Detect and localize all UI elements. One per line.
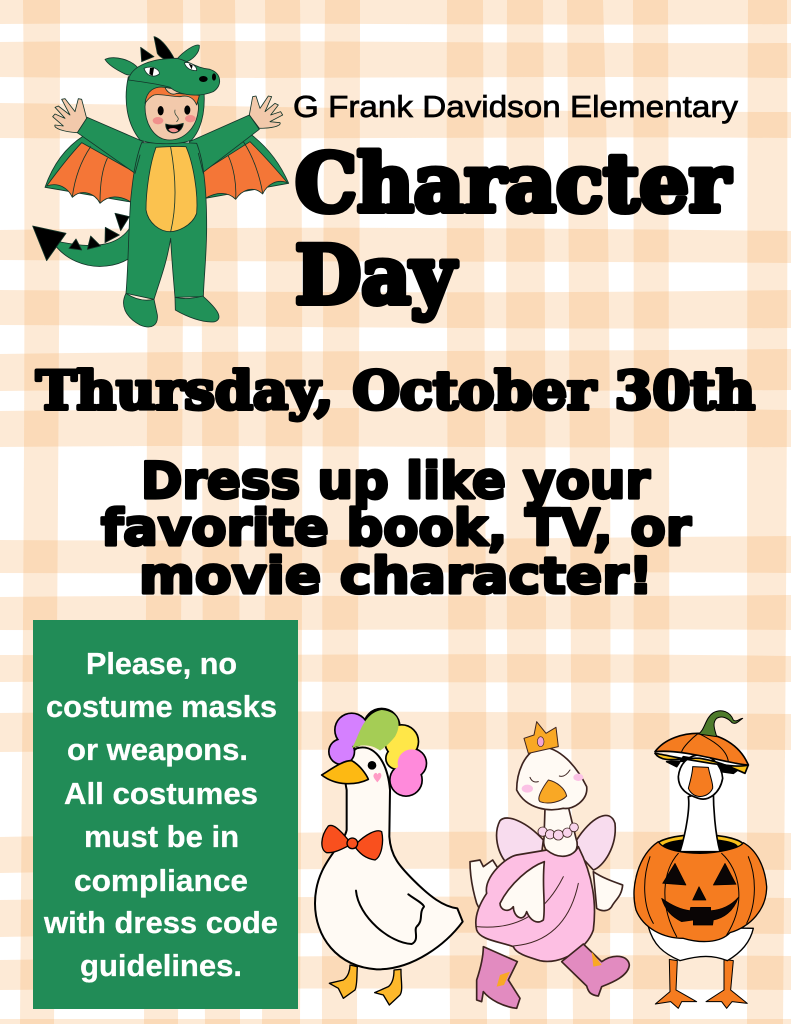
panel: costume rules: must be in	[84, 819, 239, 854]
left wing	[45, 136, 140, 203]
date line: Thursday, October 30th	[36, 361, 755, 422]
boots	[477, 944, 629, 1008]
hands	[53, 96, 283, 133]
white body	[648, 927, 753, 961]
call to action text: Dress up like your	[141, 452, 650, 510]
pumpkin body	[634, 842, 767, 942]
call to action text	[101, 452, 691, 605]
crown	[524, 722, 558, 753]
title: Day: Day	[295, 228, 457, 322]
illustration: goose with clown wig and bow tie	[315, 709, 463, 1005]
eyes, cheeks and beak	[522, 770, 583, 803]
pumpkin rim	[656, 835, 744, 859]
arms and body suit	[77, 115, 259, 327]
goose neck and head	[667, 755, 740, 852]
goose body	[315, 747, 463, 969]
clown wig	[330, 709, 426, 795]
belly	[135, 146, 203, 232]
pearl necklace	[538, 823, 578, 840]
jack-o-lantern face	[662, 863, 738, 925]
panel: costume rules: All costumes	[64, 776, 258, 811]
beak, eye and blush	[322, 761, 381, 784]
bow tie	[322, 825, 383, 860]
top line: school name: G Frank Davidson Elementary	[293, 89, 739, 124]
pumpkin hat	[655, 711, 748, 773]
fairy wings and tail	[470, 815, 623, 923]
hood and head	[105, 37, 220, 144]
goose feet	[329, 965, 402, 1005]
wing outline	[356, 891, 424, 944]
illustration: goose princess in pink dress	[470, 722, 629, 1008]
title: Character: Character	[295, 136, 731, 230]
panel: costume rules: with dress code	[43, 905, 278, 940]
panel: costume rules: costume masks	[46, 689, 277, 724]
panel: costume rules: Please, no	[86, 646, 237, 681]
folded wing	[500, 862, 544, 922]
panel: costume rules: guidelines.	[80, 948, 242, 983]
tail with spikes	[33, 213, 132, 266]
illustration: child in dragon costume	[33, 37, 289, 327]
orange legs and feet	[655, 959, 747, 1008]
panel: costume rules: compliance	[74, 863, 248, 898]
call to action text: movie character!	[139, 547, 653, 605]
pink dress	[476, 847, 595, 961]
call to action text: favorite book, TV, or	[101, 499, 691, 557]
right wing	[197, 135, 289, 199]
dress folds	[477, 877, 578, 946]
panel: costume rules	[33, 620, 298, 1009]
goose beak	[688, 767, 713, 796]
neck and head	[517, 747, 587, 860]
panel: costume rules: or weapons.	[67, 732, 248, 767]
illustration: goose in jack-o-lantern costume	[634, 711, 767, 1008]
